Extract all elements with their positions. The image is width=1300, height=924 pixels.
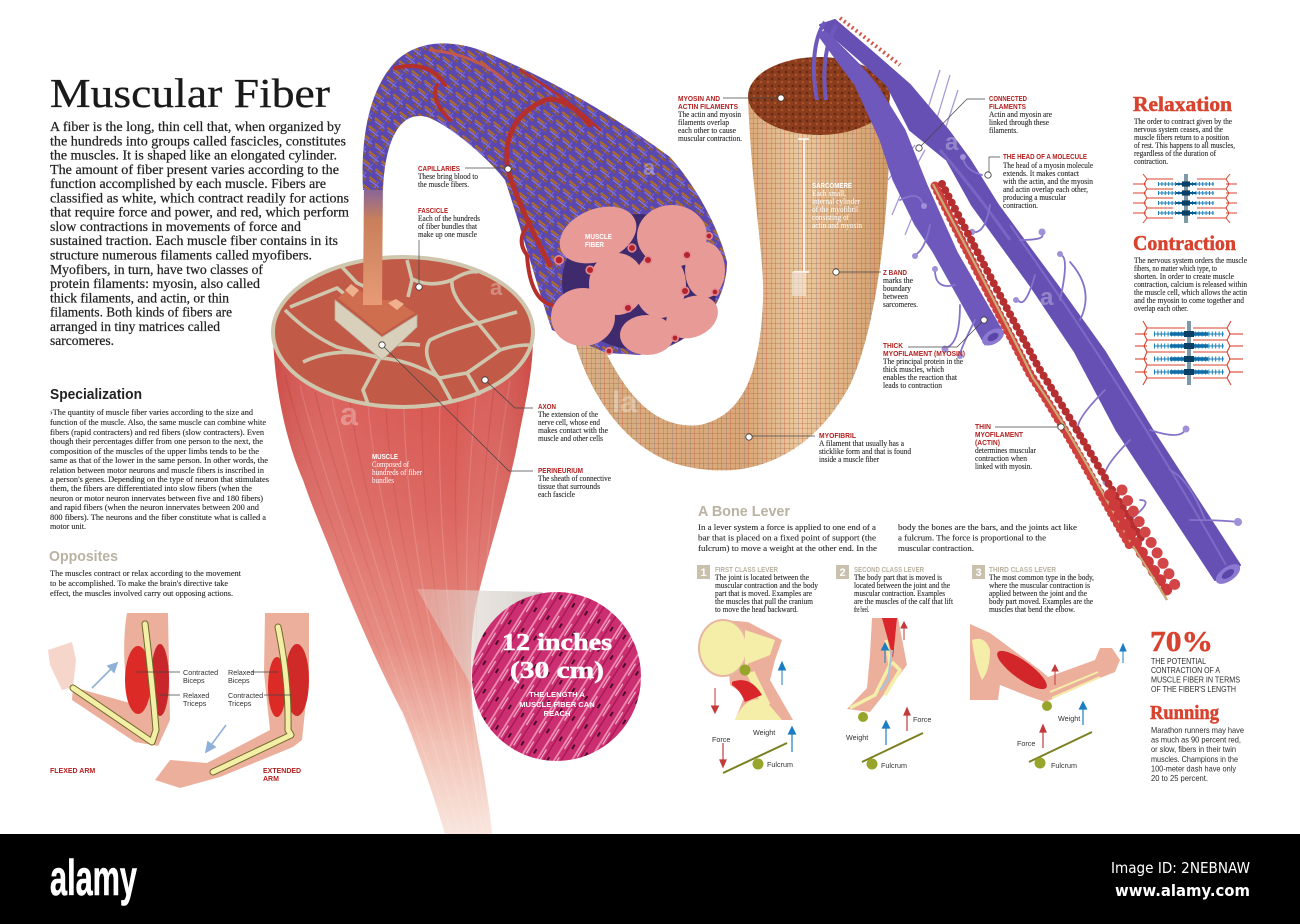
lever text: body part moved. Examples are the [989, 597, 1093, 606]
callout: thin myofilament: contraction when [975, 454, 1028, 463]
number badge [836, 565, 849, 579]
callout: capillaries: the muscle fibers. [418, 180, 469, 189]
third class lever [970, 565, 1126, 770]
muscle fiber label: MUSCLE [585, 234, 612, 241]
length caption: MUSCLE FIBER CAN [519, 700, 595, 709]
spikes [888, 70, 958, 235]
callout: z band [833, 269, 918, 309]
callout: myosin and actin filaments: ACTIN FILAMENTS [678, 104, 738, 111]
extended arm labels: Biceps [228, 676, 250, 685]
watermarks: la [612, 386, 637, 419]
watermarks: a [643, 155, 656, 180]
callout: z band: sarcomeres. [883, 300, 918, 309]
contraction panel [1133, 231, 1248, 385]
callout: connected filaments: Actin and myosin are [989, 110, 1052, 119]
lever diagram: Fulcrum [881, 761, 907, 770]
callout: thin myofilament [975, 424, 1064, 471]
arm muscles [151, 644, 169, 716]
callout: muscle [372, 454, 422, 485]
callout: myosin and actin filaments: MYOSIN AND [678, 96, 720, 103]
arrow [92, 663, 117, 688]
callout: thin myofilament: THIN [975, 424, 991, 431]
callout: capillaries: These bring blood to [418, 172, 478, 181]
intro text: classified as white, which contract readily for actions [50, 190, 349, 205]
contraction heading: Contraction [1133, 231, 1236, 255]
end face [562, 214, 718, 350]
running panel [1150, 702, 1244, 783]
specialization text: ›The quantity of muscle fiber varies according to the size and [50, 408, 254, 417]
callout: thin myofilament: determines muscular [975, 446, 1036, 455]
muscle body [273, 335, 533, 834]
callout: z band: boundary [883, 284, 912, 293]
stat caption [1151, 657, 1240, 694]
lever text [989, 567, 1094, 614]
number badge: 2 [839, 567, 846, 579]
callout: head of a molecule: and actin overlap each other, [1003, 185, 1088, 194]
callout: axon: muscle and other cells [538, 434, 603, 443]
callout: myosin and actin filaments: muscular contraction. [678, 134, 742, 143]
relaxation text: of rest. This happens to all muscles, [1134, 141, 1235, 150]
extended arm labels: EXTENDED [263, 768, 301, 775]
lever diagram: Weight [753, 728, 775, 737]
filaments [814, 18, 1243, 600]
lever text: the muscles that pull the cranium [715, 597, 813, 606]
footer band [0, 834, 1300, 924]
watermarks [340, 129, 1054, 432]
watermarks: a [340, 396, 358, 432]
lever diagram [846, 708, 931, 770]
callout: muscle: MUSCLE [372, 454, 398, 461]
lever text: part that is moved. Examples are [715, 589, 812, 598]
callout: head of a molecule: with the actin, and the myosin [1003, 177, 1094, 186]
lever text [715, 567, 819, 614]
relaxation text [1134, 117, 1235, 166]
stat caption: THE POTENTIAL [1151, 657, 1206, 666]
callout: connected filaments [916, 96, 1052, 151]
opposites text: to be accomplished. To make the brain's directive take [50, 579, 228, 588]
callout: thick myofilament: The principal protein in the [883, 357, 963, 366]
callout: myosin and actin filaments [678, 95, 784, 143]
callout: axon: makes contact with the [538, 426, 608, 435]
relaxation text: nervous system ceases, and the [1134, 125, 1223, 134]
lever diagram: Fulcrum [1051, 761, 1077, 770]
lever diagram: Weight [1058, 714, 1080, 723]
running text: as much as 90 percent red, [1151, 736, 1241, 744]
capillary dots [555, 233, 718, 354]
muscle fiber bundle [363, 43, 727, 355]
sarcomere marker [793, 139, 809, 272]
contraction text: overlap each other. [1134, 304, 1188, 313]
number badge [697, 565, 710, 579]
number badge [972, 565, 985, 579]
flexed arm labels: Triceps [183, 699, 207, 708]
length caption: REACH [543, 709, 571, 718]
callout: z band: Z BAND [883, 270, 907, 277]
callout: fascicle [416, 208, 480, 290]
callout: capillaries: CAPILLARIES [418, 166, 460, 173]
lever text: muscles that bend the elbow. [989, 605, 1075, 614]
specialization text: neuron or motor neuron innervates between five and 180 fibers) [50, 494, 263, 503]
running heading: Running [1150, 702, 1219, 724]
bone lever intro: fulcrum) to move a weight at the other end. In the [698, 543, 877, 553]
intro text: Myofibers, in turn, have two classes of [50, 262, 263, 277]
callout: axon [482, 377, 608, 443]
intro text: that require force and power, and red, which perform [50, 205, 349, 220]
fascicle partitions [285, 260, 529, 404]
specialization text: relation between motor neurons and muscle fibers is inscribed in [50, 466, 265, 475]
specialization text: same as that of the lower in the same person. In other words, the [50, 456, 268, 465]
relaxation text: contraction. [1134, 157, 1168, 166]
lever text: to move the head backward. [715, 605, 798, 614]
lever text: where the muscular contraction is [989, 581, 1090, 590]
lever text: SECOND CLASS LEVER [854, 567, 924, 574]
extended arm labels: Contracted [228, 691, 263, 700]
callout: perineurium: PERINEURIUM [538, 468, 583, 475]
lever text [854, 567, 954, 614]
watermarks: a [945, 129, 959, 156]
callout: sarcomere: actin and myosin [812, 221, 862, 230]
callout: myofibril: sticklike form and that is found [819, 447, 912, 456]
specialization text: a person's genes. Depending on the type of neuron that stimulates [50, 475, 269, 484]
callout: thick myofilament: MYOFILAMENT (MYOSIN) [883, 351, 965, 358]
intro text: slow contractions in movements of force and [50, 219, 301, 234]
muscle illustration [273, 257, 533, 834]
extended arm labels [228, 668, 301, 783]
lever text: The body part that is moved is [854, 573, 942, 582]
title: Muscular Fiber [50, 70, 330, 116]
running text: 20 to 25 percent. [1151, 774, 1208, 783]
callout: sarcomere: of the myofibril [812, 205, 859, 214]
callout: muscle: Composed of [372, 460, 409, 469]
contraction text: contraction, calcium is released within [1134, 280, 1248, 289]
lever text: THIRD CLASS LEVER [989, 567, 1056, 574]
stat caption: CONTRACTION OF A [1151, 666, 1220, 675]
callout: myosin and actin filaments: filaments overlap [678, 118, 729, 127]
specialization text: 800 fibers). The neurons and the fiber constitute what is called a [50, 513, 266, 522]
lever text: The most common type in the body, [989, 573, 1094, 582]
bone lever intro: body the bones are the bars, and the joints act like [898, 522, 1077, 532]
callout: perineurium: each fascicle [538, 490, 575, 499]
running text [1151, 726, 1244, 783]
length value: 12 inches [502, 630, 612, 656]
flexed arm labels [50, 668, 218, 775]
extended arm labels: ARM [263, 776, 279, 783]
flexed arm labels: Biceps [183, 676, 205, 685]
callout: connected filaments: filaments. [989, 126, 1018, 135]
image id: Image ID: 2NEBNAW [1111, 859, 1250, 877]
intro text: structure numerous filaments called myofibers. [50, 248, 312, 262]
bone lever heading: A Bone Lever [698, 503, 790, 520]
callout: myofibril [746, 433, 912, 464]
callout: muscle: bundles [372, 476, 394, 485]
lever text: FIRST CLASS LEVER [715, 567, 778, 574]
callout: head of a molecule: THE HEAD OF A MOLECULE [1003, 154, 1087, 161]
callout: axon: nerve cell, whose end [538, 418, 601, 427]
thick myofilament small [818, 30, 1003, 345]
lever diagram: Force [913, 715, 931, 724]
specialization text: motor unit. [50, 522, 86, 531]
first class lever [697, 565, 819, 773]
callout: thin myofilament: linked with myosin. [975, 462, 1032, 471]
callout: thick myofilament: THICK [883, 343, 903, 350]
arm skin [155, 613, 309, 788]
callout: axon: The extension of the [538, 410, 598, 419]
specialization text: fibers (rapid contracters) and red fibers (slow contracters). Even [50, 428, 265, 437]
contraction text: the muscle cell, which allows the actin [1134, 288, 1248, 297]
contraction text [1134, 256, 1248, 313]
callout: perineurium [379, 342, 611, 499]
length caption [519, 690, 595, 718]
flexed arm [48, 613, 170, 746]
callout: thin myofilament: (ACTIN) [975, 440, 1000, 447]
specialization text: and rapid fibers (when the neuron innervates between 200 and [50, 503, 260, 512]
contraction text: The nervous system orders the muscle [1134, 256, 1247, 265]
specialization text: composition of the muscles of the upper limbs tends to be the [50, 447, 259, 456]
callout: fascicle: of fiber bundles that [418, 222, 478, 231]
bone lever intro: a fulcrum. The force is proportional to the [898, 532, 1046, 542]
callout: fascicle: FASCICLE [418, 208, 448, 215]
intro text: the hundreds into groups called fascicles, constitutes [50, 133, 346, 148]
callout: z band: between [883, 292, 909, 301]
relaxation diagram [1133, 174, 1237, 223]
main filament [820, 20, 1240, 580]
lever text: muscular contraction and the body [715, 581, 819, 590]
flexed arm labels: Relaxed [183, 691, 209, 700]
alamy logo: alamy [50, 850, 137, 906]
callout: thick myofilament [883, 317, 987, 390]
arm illustration [970, 624, 1126, 711]
running text: Marathon runners may have [1151, 726, 1244, 735]
intro text [50, 119, 349, 348]
specialization heading: Specialization [50, 386, 142, 403]
arrow [206, 725, 226, 752]
lever text: the heel. [854, 605, 869, 614]
second class lever [836, 565, 954, 770]
callout: perineurium: The sheath of connective [538, 474, 611, 483]
myofibril top cap [748, 57, 890, 135]
watermarks: a [490, 275, 503, 300]
intro text: filaments. Both kinds of fibers are [50, 305, 232, 320]
intro text: function accomplished by each muscle. Fibers are [50, 176, 326, 191]
intro text: arranged in tiny matrices called [50, 319, 220, 334]
extended arm labels: Relaxed [228, 668, 254, 677]
specialization text: function of the muscle. Also, the same muscle can combine white [50, 418, 266, 427]
callout: fascicle: make up one muscle [418, 230, 477, 239]
running text: 100-meter dash have only [1151, 764, 1237, 774]
callout: head of a molecule: extends. It makes contact [1003, 169, 1080, 178]
number badge: 3 [975, 567, 982, 579]
bone lever intro: muscular contraction. [898, 543, 974, 553]
lever text: are the muscles of the calf that lift [854, 597, 954, 606]
watermarks: a [1040, 284, 1054, 311]
lever text: applied between the joint and the [989, 589, 1087, 598]
opposites text: The muscles contract or relax according to the movement [50, 569, 242, 578]
muscle fibers [285, 375, 510, 830]
stat caption: OF THE FIBER'S LENGTH [1151, 685, 1236, 694]
callout: head of a molecule: producing a muscular [1003, 193, 1066, 202]
stat caption: MUSCLE FIBER IN TERMS [1151, 676, 1240, 684]
relaxation heading: Relaxation [1133, 92, 1232, 116]
intro text: A fiber is the long, thin cell that, when organized by [50, 119, 341, 134]
callout: myofibril: inside a muscle fiber [819, 455, 879, 464]
callout: head of a molecule: contraction. [1003, 201, 1038, 210]
lever diagram [712, 727, 796, 773]
extended arm [155, 613, 309, 788]
intro text: thick filaments, and actin, or thin [50, 290, 229, 305]
cutaway block [335, 300, 417, 360]
lever text: muscular contraction. Examples [854, 589, 945, 598]
fiber length circle [472, 592, 641, 761]
callout: capillaries [418, 166, 511, 189]
callout: perineurium: tissue that surrounds [538, 482, 600, 491]
stems [814, 22, 836, 100]
intro text: sarcomeres. [50, 333, 114, 348]
stem [363, 175, 383, 305]
bone lever intro: bar that is placed on a fixed point of support (the [698, 532, 876, 542]
arm muscles [285, 644, 309, 716]
extended arm labels: Triceps [228, 699, 252, 708]
callout: z band: marks the [883, 276, 913, 285]
intro text: sustained traction. Each muscle fiber contains in its [50, 233, 338, 248]
opposites text [50, 569, 242, 598]
callout: myofibril: A filament that usually has a [819, 439, 904, 448]
callout: head of a molecule: The head of a myosin molecule [1003, 161, 1093, 170]
contraction text: fibers, no matter which type, to [1134, 264, 1217, 273]
contraction text: shorten. In order to create muscle [1134, 272, 1234, 281]
length value: (30 cm) [510, 658, 604, 684]
lever diagram: Force [712, 735, 730, 744]
callout: thick myofilament: thick muscles, which [883, 365, 945, 374]
foot illustration [847, 618, 907, 722]
flexed arm labels: FLEXED ARM [50, 768, 95, 775]
running text: muscles. Champions in the [1151, 755, 1238, 764]
muscle fiber label: FIBER [585, 242, 604, 249]
lever text: The joint is located between the [715, 573, 809, 582]
length value [502, 630, 612, 684]
relaxation text: muscle fibers return to a position [1134, 133, 1230, 142]
bone lever intro [698, 522, 1077, 553]
muscle top section [273, 257, 533, 407]
muscle fiber label [585, 234, 612, 249]
opposites text: effect, the muscles involved carry out opposing actions. [50, 589, 233, 598]
callout: myosin and actin filaments: The actin and myosin [678, 110, 742, 119]
callout: head of a molecule [985, 154, 1094, 210]
lever diagram: Weight [846, 733, 868, 742]
number badge: 1 [700, 567, 707, 579]
website: www.alamy.com [1115, 881, 1250, 900]
callout: sarcomere: SARCOMERE [812, 183, 852, 190]
callout: sarcomere: consisting of [812, 213, 849, 222]
intro text: the muscles. It is shaped like an elongated cylinder. [50, 148, 337, 163]
contraction diagram [1135, 321, 1243, 385]
callout: thick myofilament: enables the reaction that [883, 373, 958, 382]
relaxation panel [1133, 92, 1237, 223]
bone lever intro: In a lever system a force is applied to one end of a [698, 522, 876, 532]
70 percent stat: 70% [1150, 626, 1213, 658]
arm bones [213, 627, 291, 772]
relaxation text: regardless of the duration of [1134, 149, 1216, 158]
flexed arm labels: Contracted [183, 668, 218, 677]
thin actin myofilament [933, 184, 1175, 600]
arm bones [73, 624, 156, 742]
relaxation text: The order to contract given by the [1134, 117, 1232, 126]
running text: or slow, fibers in their twin [1151, 745, 1236, 754]
opposites heading: Opposites [49, 548, 118, 565]
filament ends [1213, 560, 1243, 588]
lever text: located between the joint and the [854, 581, 950, 590]
callout: myosin and actin filaments: each other to cause [678, 126, 736, 135]
callout: axon: AXON [538, 404, 556, 411]
specialization text [50, 408, 269, 531]
callout: thick myofilament: leads to contraction [883, 381, 943, 390]
callout: connected filaments: linked through these [989, 118, 1049, 127]
callout: myofibril: MYOFIBRIL [819, 433, 857, 440]
arm skin [72, 613, 170, 746]
intro text: The amount of fiber present varies according to the [50, 162, 339, 177]
bundle tube [363, 43, 727, 355]
fist [48, 642, 76, 690]
callout: connected filaments: CONNECTED [989, 96, 1027, 103]
contraction text: and the myosin to come together and [1134, 296, 1245, 305]
capillaries [395, 50, 600, 305]
lever diagram: Force [1017, 739, 1035, 748]
lever diagram [1017, 702, 1092, 770]
head illustration [699, 620, 793, 720]
callout: thin myofilament: MYOFILAMENT [975, 432, 1024, 439]
myofibril curved [572, 57, 890, 470]
length caption: THE LENGTH A [529, 690, 585, 699]
zoom wedge [417, 589, 543, 692]
specialization text: though their percentages differ from one person to the next, the [50, 437, 263, 446]
callout: muscle: hundreds of fiber [372, 468, 422, 477]
70 percent stat [1150, 626, 1240, 694]
callout: connected filaments: FILAMENTS [989, 104, 1026, 111]
specialization text: them, the fibers are differentiated into slow fibers (when the [50, 484, 252, 493]
lever diagram: Fulcrum [767, 760, 793, 769]
callout: sarcomere [812, 183, 862, 230]
callout: fascicle: Each of the hundreds [418, 214, 480, 223]
intro text: protein filaments: myosin, also called [50, 276, 260, 291]
myosin heads [900, 158, 1238, 522]
callout: sarcomere: Each small, [812, 189, 846, 198]
callout: sarcomere: internal cylinder [812, 197, 860, 206]
